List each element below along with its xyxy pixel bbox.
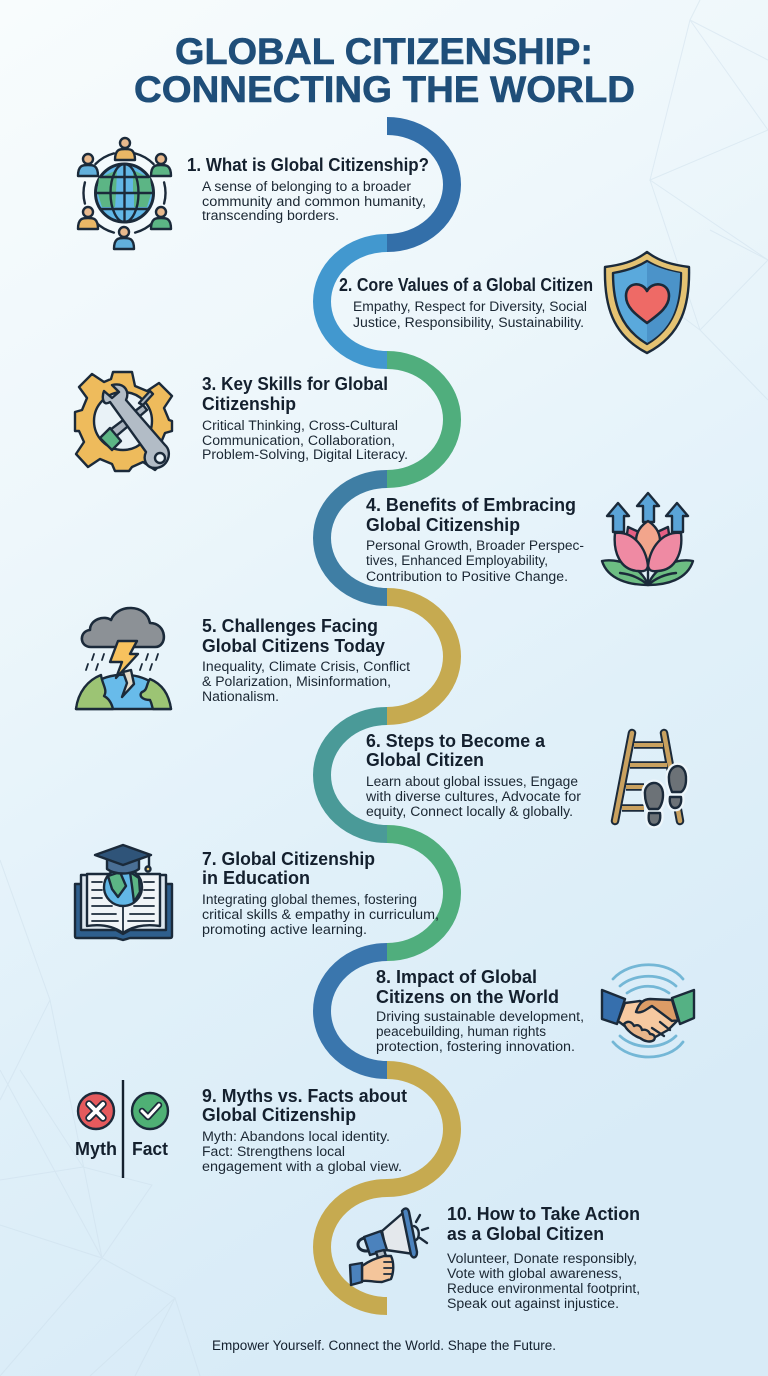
text 1: transcending borders. (202, 208, 339, 223)
panel: 3 key skills (75, 372, 408, 471)
text 10 (447, 1251, 640, 1311)
text 3: Problem-Solving, Digital Literacy. (202, 447, 408, 462)
text 2: Justice, Responsibility, Sustainability. (353, 315, 584, 330)
text 3: Critical Thinking, Cross-Cultural (202, 418, 398, 433)
heading 5: Global Citizens Today (202, 636, 385, 656)
heading 2: 2. Core Values of a Global Citizen (339, 275, 593, 295)
title: GLOBAL CITIZENSHIP: (175, 31, 593, 72)
heading 8: Citizens on the World (376, 987, 559, 1007)
panel: 1 what is global citizenship (78, 138, 429, 249)
text 7: Integrating global themes, fostering (202, 892, 417, 907)
panel: 8 impact (376, 965, 694, 1057)
text 9: Fact: Strengthens local (202, 1144, 345, 1159)
heading 10: 10. How to Take Action (447, 1204, 640, 1224)
text 1: A sense of belonging to a broader (202, 179, 412, 194)
panel: 2 core values (339, 252, 689, 353)
panel: 7 education (75, 845, 439, 940)
icon: ladder and footprints (615, 733, 686, 825)
heading 10 (447, 1204, 640, 1244)
text 10: Volunteer, Donate responsibly, (447, 1251, 637, 1266)
heading 8: 8. Impact of Global (376, 967, 537, 987)
text 6: equity, Connect locally & globally. (366, 804, 573, 819)
panel: 9 myths vs facts (75, 1080, 407, 1178)
text 10: Reduce environmental footprint, (447, 1281, 640, 1296)
icon: storm over globe (76, 608, 171, 709)
text 4: Contribution to Positive Change. (366, 569, 568, 584)
text 5 (202, 659, 410, 704)
text 1: community and common humanity, (202, 194, 426, 209)
heading 8 (376, 967, 559, 1007)
text 10: Speak out against injustice. (447, 1296, 619, 1311)
text 9: engagement with a global view. (202, 1159, 402, 1174)
text 9: Myth: Abandons local identity. (202, 1129, 390, 1144)
heading 9 (202, 1086, 407, 1125)
heading 6: Global Citizen (366, 750, 484, 770)
text 7: promoting active learning. (202, 922, 367, 937)
text 3: Communication, Collaboration, (202, 433, 395, 448)
panel: 10 take action (350, 1204, 640, 1311)
icon: myth and fact badges: Fact (132, 1139, 168, 1159)
icon: myth and fact badges (75, 1080, 168, 1178)
title: CONNECTING THE WORLD (134, 69, 635, 110)
text 10: Vote with global awareness, (447, 1266, 622, 1281)
panel: 5 challenges (76, 608, 410, 709)
heading 3: Citizenship (202, 394, 296, 414)
text 5: Inequality, Climate Crisis, Conflict (202, 659, 410, 674)
text 6 (365, 774, 582, 819)
heading 10: as a Global Citizen (447, 1224, 604, 1244)
text 4 (366, 538, 584, 584)
icon: book, globe and cap (75, 845, 172, 940)
heading 9: Global Citizenship (202, 1105, 356, 1125)
icon: myth and fact badges: Myth (75, 1139, 117, 1159)
text 3 (202, 418, 408, 462)
footer tagline: Empower Yourself. Connect the World. Shape the Future. (212, 1338, 556, 1353)
text 8 (376, 1009, 584, 1054)
text 4: tives, Enhanced Employability, (366, 553, 548, 568)
heading 4: Global Citizenship (366, 515, 520, 535)
text 6: Learn about global issues, Engage (366, 774, 578, 789)
text 8: protection, fostering innovation. (376, 1039, 575, 1054)
heading 3 (202, 374, 388, 414)
heading 6: 6. Steps to Become a (366, 731, 546, 751)
heading 1: 1. What is Global Citizenship? (187, 155, 429, 175)
text 1 (202, 179, 426, 223)
heading 5: 5. Challenges Facing (202, 616, 378, 636)
text 2: Empathy, Respect for Diversity, Social (353, 299, 587, 314)
text 2 (353, 299, 587, 330)
heading 7 (202, 849, 375, 888)
text 6: with diverse cultures, Advocate for (365, 789, 582, 804)
icon: globe and people (78, 138, 171, 249)
text 5: & Polarization, Misinformation, (202, 674, 391, 689)
heading 7: 7. Global Citizenship (202, 849, 375, 869)
text 8: Driving sustainable development, (376, 1009, 584, 1024)
text 4: Personal Growth, Broader Perspec- (366, 538, 584, 553)
heading 4: 4. Benefits of Embracing (366, 495, 576, 515)
icon: shield with heart (605, 252, 689, 353)
panel: 6 steps (365, 731, 686, 825)
heading 3: 3. Key Skills for Global (202, 374, 388, 394)
icon: handshake (602, 965, 694, 1057)
icon: megaphone (350, 1208, 428, 1285)
heading 9: 9. Myths vs. Facts about (202, 1086, 407, 1106)
title (134, 31, 635, 110)
heading 5 (202, 616, 385, 656)
heading 4 (366, 495, 576, 535)
text 9 (202, 1129, 402, 1174)
text 7 (202, 892, 439, 937)
text 8: peacebuilding, human rights (376, 1024, 546, 1039)
icon: lotus with arrows (602, 493, 693, 585)
text 5: Nationalism. (202, 689, 279, 704)
icon: gear with tools (75, 372, 172, 471)
text 7: critical skills & empathy in curriculum, (202, 907, 439, 922)
panel: 4 benefits (366, 493, 693, 585)
heading 6 (366, 731, 546, 770)
winding path (322, 126, 452, 1306)
heading 7: in Education (202, 868, 310, 888)
